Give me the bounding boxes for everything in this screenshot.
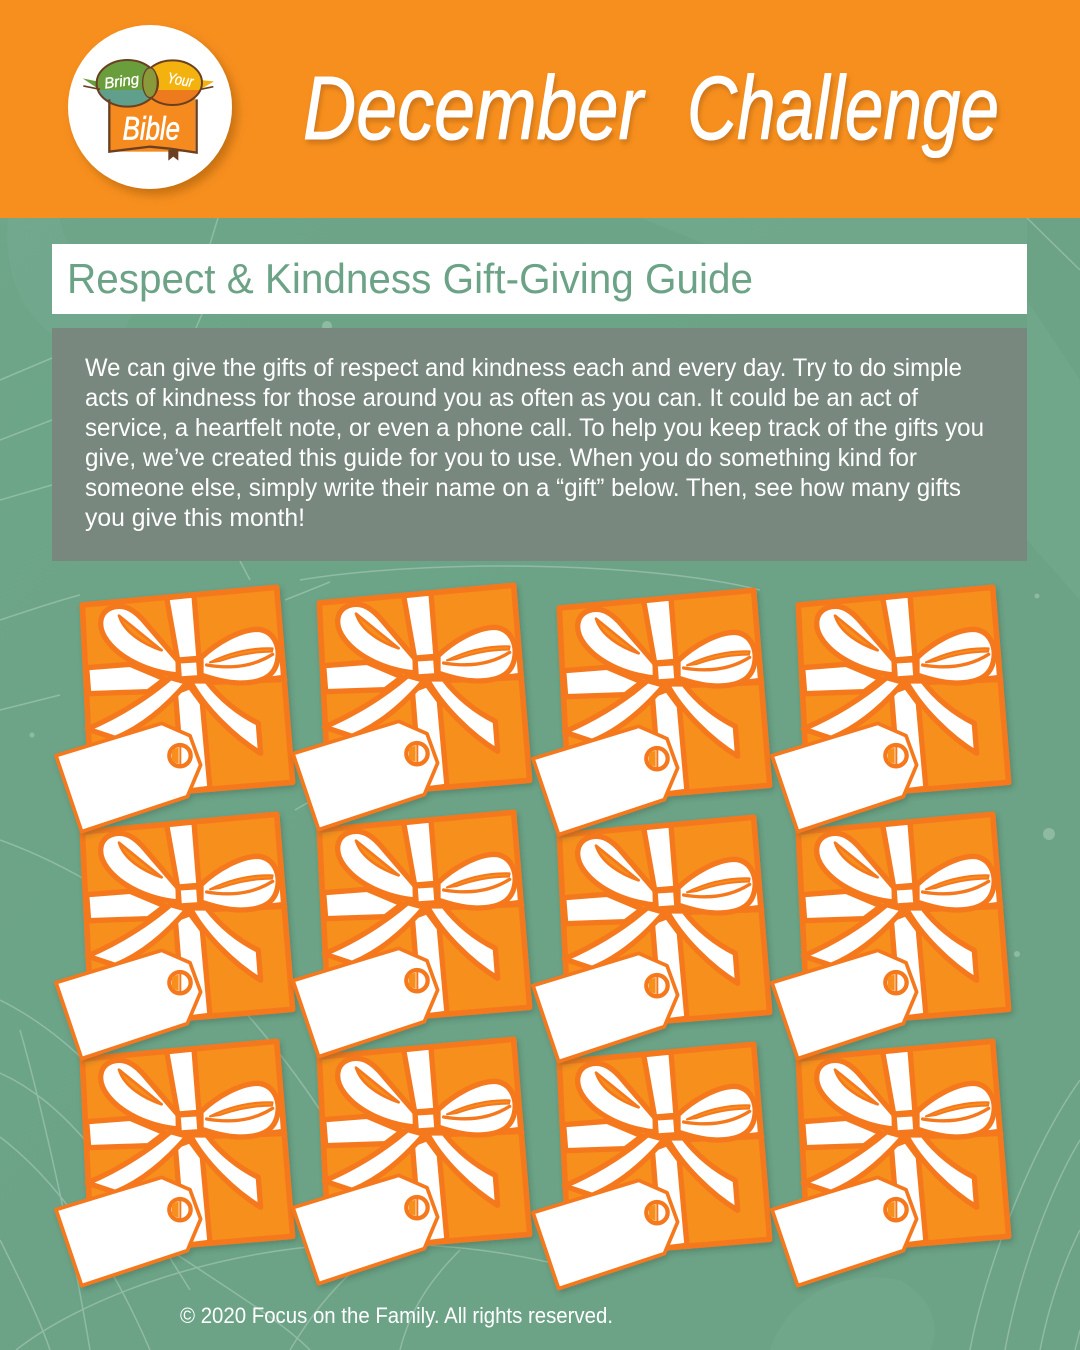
intro text panel: We can give the gifts of respect and kindness each and every day. Try to do simple [85, 354, 962, 382]
intro text panel: give, we’ve created this guide for you to use. When you do something kind for [85, 444, 917, 472]
intro text panel [52, 328, 1027, 561]
header band [0, 0, 1080, 218]
heading panel: Respect & Kindness Gift-Giving Guide [67, 255, 753, 302]
logo badge [68, 25, 232, 189]
intro text panel: someone else, simply write their name on a “gift” below. Then, see how many gifts [85, 474, 961, 502]
title: December Challenge: December [303, 59, 645, 159]
intro text panel: acts of kindness for those around you as often as you can. It could be an act of [85, 384, 918, 412]
logo wordmark second word: Your [166, 70, 195, 91]
gift row 3 [56, 1039, 1009, 1289]
heading panel [52, 244, 1027, 314]
copyright footer: © 2020 Focus on the Family. All rights reserved. [180, 1303, 613, 1328]
gift row 1 [56, 585, 1009, 835]
intro text panel: service, a heartfelt note, or even a phone call. To help you keep track of the gifts you [85, 414, 984, 442]
logo wordmark third word: Bible [123, 109, 180, 146]
intro text panel: you give this month! [85, 504, 305, 532]
logo wordmark: Bring [103, 71, 141, 93]
gift grid [56, 585, 1009, 1289]
gift row 2 [56, 812, 1009, 1062]
title: December Challenge [303, 59, 999, 159]
